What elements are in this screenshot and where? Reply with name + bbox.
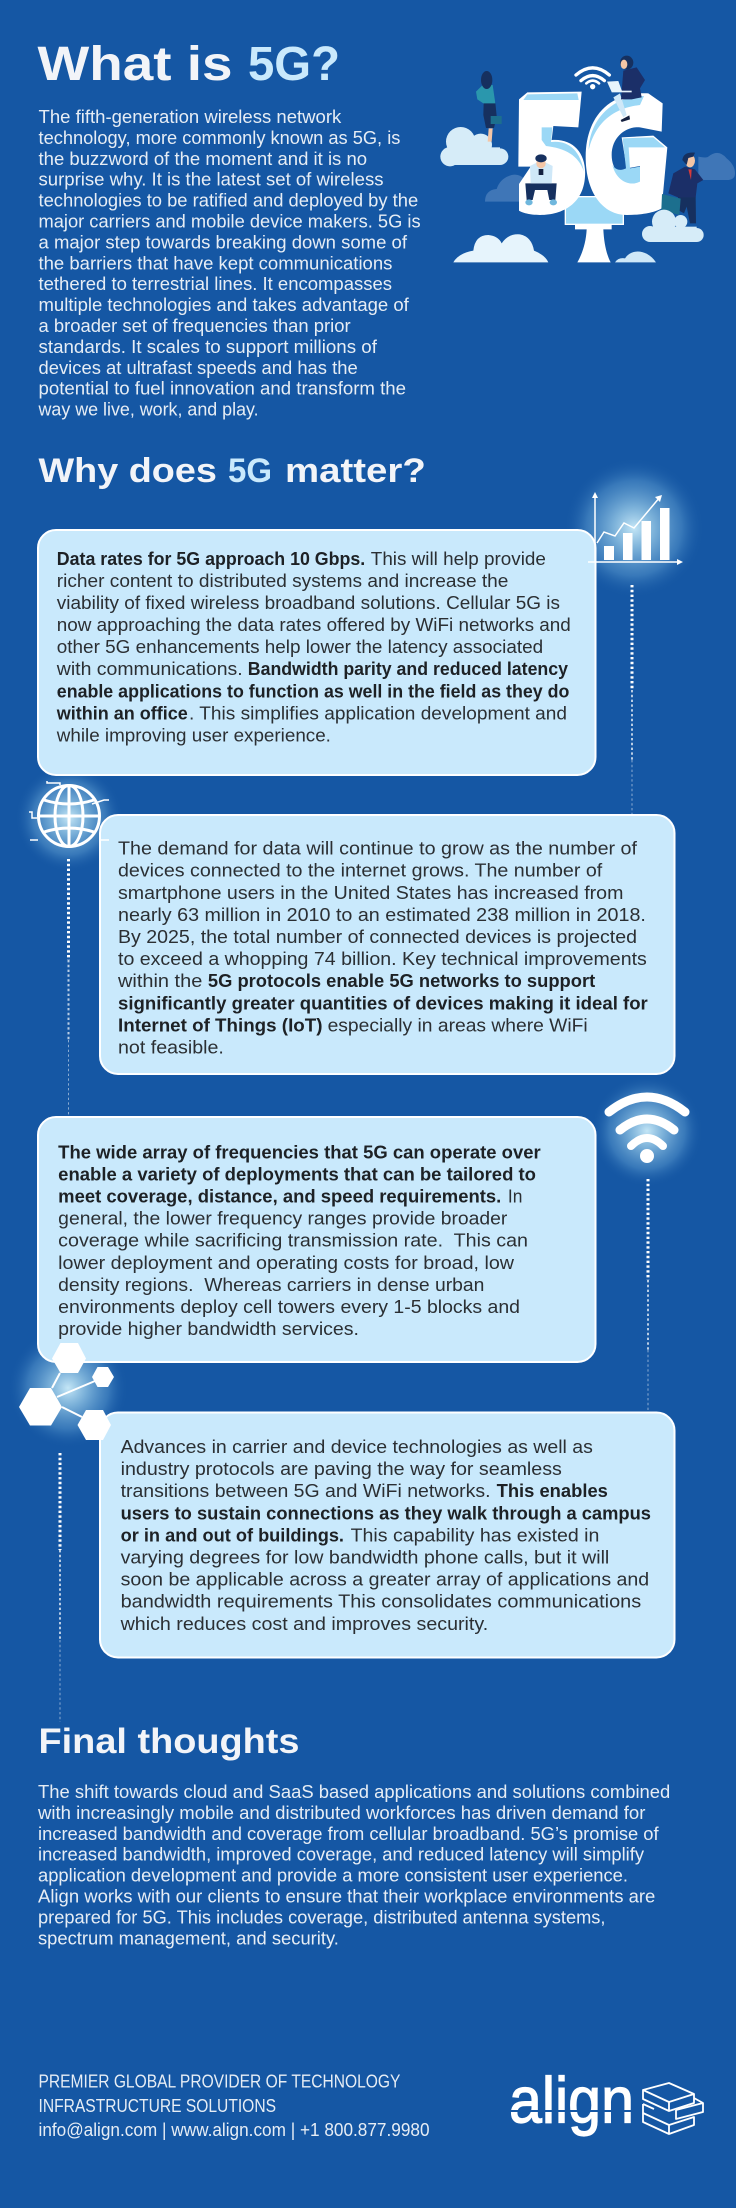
card text: demand for data: Internet of Things (IoT) <box>118 1015 322 1035</box>
footer contact text: PREMIER GLOBAL PROVIDER OF TECHNOLOGY <box>38 2072 400 2092</box>
card text: seamless transitions: soon be applicable across a greater array of applications and <box>121 1570 649 1590</box>
final thoughts text block: increased bandwidth, improved coverage, and reduced latency will simplify <box>38 1845 644 1865</box>
icon: sign plate <box>565 197 623 224</box>
final thoughts text block: application development and provide a more consistent user experience. <box>38 1866 628 1886</box>
card text: data rates: This will help provide <box>371 549 546 569</box>
card text: demand for data: especially in areas where WiFi <box>328 1015 588 1035</box>
icon: bottom clouds <box>453 234 656 262</box>
title: 5G? <box>248 38 340 91</box>
card text: demand for data: The demand for data will continue to grow as the number of <box>118 839 638 859</box>
card text: data rates: Data rates for 5G approach 10 Gbps. <box>57 549 365 569</box>
card text: demand for data: nearly 63 million in 2010 to an estimated 238 million in 2018. <box>118 905 646 925</box>
panel: frequencies card <box>38 1117 596 1362</box>
icon: wifi <box>609 1097 685 1160</box>
intro text block: way we live, work, and play. <box>38 400 259 420</box>
final thoughts text block: spectrum management, and security. <box>38 1928 339 1948</box>
card text: seamless transitions: This capability has existed in <box>351 1525 599 1545</box>
card text: data rates: with communications. <box>56 659 243 679</box>
panel: seamless transitions card <box>100 1412 674 1658</box>
card text: frequencies: meet coverage, distance, and speed requirements. <box>58 1186 501 1206</box>
intro text block: a broader set of frequencies than prior <box>38 316 351 336</box>
icon: man on the phone <box>661 153 703 223</box>
connector: chart to second card <box>630 585 634 814</box>
connector: globe to third card <box>67 859 70 1116</box>
card text: seamless transitions: industry protocols are paving the way for seamless <box>121 1459 562 1479</box>
card text: seamless transitions: This enables <box>497 1481 608 1501</box>
icon: wifi signal <box>576 68 609 88</box>
connector: wifi to fourth card <box>646 1179 650 1412</box>
card text: seamless transitions: users to sustain connections as they walk through a campus <box>121 1503 651 1523</box>
heading: why does 5G matter: Why does <box>38 452 217 490</box>
footer contact text: info@align.com | www.align.com | +1 800.877.9980 <box>38 2120 430 2140</box>
intro text block: potential to fuel innovation and transform the <box>38 379 406 399</box>
final thoughts text block: increased bandwidth and coverage from cellular broadband. 5G’s promise of <box>38 1824 660 1844</box>
card text: data rates: enable applications to function as well in the field as they do <box>57 681 569 701</box>
intro text block: standards. It scales to support millions of <box>38 337 378 357</box>
card text: demand for data: devices connected to the internet grows. The number of <box>118 861 603 881</box>
logo: align <box>505 2064 703 2137</box>
intro text block: tethered to terrestrial lines. It encompasses <box>38 274 392 294</box>
heading: why does 5G matter: 5G <box>228 452 272 490</box>
icon: growth chart <box>588 492 683 565</box>
icon: left cloud <box>440 127 508 166</box>
card text: seamless transitions: bandwidth requirements This consolidates communications <box>121 1592 641 1612</box>
intro text block: devices at ultrafast speeds and has the <box>38 358 358 378</box>
intro text block: multiple technologies and takes advantage of <box>38 295 410 315</box>
card text: frequencies: coverage while sacrificing transmission rate. This can <box>58 1231 528 1251</box>
title <box>38 38 340 91</box>
heading: why does 5G matter <box>38 452 426 490</box>
glow behind globe icon <box>15 764 123 872</box>
intro text block: technologies to be ratified and deployed by the <box>38 191 418 211</box>
final thoughts text block <box>37 1782 670 1948</box>
illustration: 5G sign with people and clouds <box>440 56 735 262</box>
card text: demand for data: to exceed a whopping 74 billion. Key technical improvements <box>118 949 647 969</box>
card text: seamless transitions: or in and out of buildings. <box>121 1525 344 1545</box>
icon: pedestal <box>575 224 612 262</box>
intro text block: a major step towards breaking down some of <box>38 232 408 252</box>
card text: seamless transitions <box>120 1437 651 1634</box>
card text: frequencies: In <box>508 1186 522 1206</box>
intro text block: the buzzword of the moment and it is no <box>38 149 367 169</box>
intro text block: the barriers that have kept communications <box>38 253 392 273</box>
card text: frequencies <box>58 1142 541 1339</box>
card text: seamless transitions: which reduces cost and improves security. <box>120 1614 488 1634</box>
icon: seated man with phone <box>525 154 557 205</box>
card text: demand for data: not feasible. <box>118 1038 224 1058</box>
icon: network hexagons <box>19 1343 114 1440</box>
intro text block <box>38 107 421 420</box>
card text: demand for data: 5G protocols enable 5G networks to support <box>208 971 595 991</box>
connector: network to final section <box>58 1453 62 1722</box>
glow behind wifi icon <box>591 1075 703 1187</box>
icon: digit 5 <box>518 92 585 215</box>
final thoughts text block: with increasingly mobile and distributed workforces has driven demand for <box>37 1803 645 1823</box>
icon: faded clouds <box>485 153 735 202</box>
intro text block: major carriers and mobile device makers. 5G is <box>38 212 421 232</box>
card text: data rates: while improving user experience. <box>56 725 331 745</box>
card text: demand for data: By 2025, the total number of connected devices is projected <box>118 927 637 947</box>
intro text block: technology, more commonly known as 5G, is <box>38 128 400 148</box>
card text: data rates: other 5G enhancements help lower the latency associated <box>57 637 543 657</box>
card text: data rates: Bandwidth parity and reduced latency <box>248 659 568 679</box>
panel: data rates card <box>38 530 596 775</box>
icon: globe <box>29 781 109 846</box>
card text: demand for data: significantly greater quantities of devices making it ideal for <box>118 993 648 1013</box>
final thoughts text block: Align works with our clients to ensure that their workplace environments are <box>38 1886 655 1906</box>
icon: lower right cloud <box>642 210 704 242</box>
icon: standing woman <box>476 71 502 142</box>
logo: align: align <box>509 2064 634 2137</box>
card text: frequencies: environments deploy cell towers every 1-5 blocks and <box>58 1297 520 1317</box>
title: What is <box>38 38 233 91</box>
final thoughts text block: prepared for 5G. This includes coverage, distributed antenna systems, <box>38 1907 606 1927</box>
card text: frequencies: enable a variety of deployments that can be tailored to <box>58 1164 536 1184</box>
intro text block: The fifth-generation wireless network <box>38 107 342 127</box>
card text: frequencies: provide higher bandwidth services. <box>58 1319 359 1339</box>
card text: frequencies: lower deployment and operating costs for broad, low <box>58 1253 515 1273</box>
card text: data rates: within an office <box>56 703 188 723</box>
glow behind network icon <box>8 1328 128 1448</box>
card text: data rates: richer content to distributed systems and increase the <box>57 571 508 591</box>
card text: seamless transitions: varying degrees for low bandwidth phone calls, but it will <box>121 1548 609 1568</box>
footer contact text: INFRASTRUCTURE SOLUTIONS <box>38 2096 276 2116</box>
card text: seamless transitions: transitions between 5G and WiFi networks. <box>121 1481 490 1501</box>
icon: stacked boxes <box>643 2083 703 2134</box>
card text: frequencies: general, the lower frequency ranges provide broader <box>58 1209 507 1229</box>
panel: demand for data card <box>100 815 674 1074</box>
intro text block: surprise why. It is the latest set of wireless <box>38 170 384 190</box>
card text: demand for data <box>117 839 648 1058</box>
card text: data rates: . This simplifies application development and <box>189 703 567 723</box>
card text: data rates <box>56 549 571 745</box>
final thoughts text block: The shift towards cloud and SaaS based applications and solutions combined <box>38 1782 670 1802</box>
card text: data rates: viability of fixed wireless broadband solutions. Cellular 5G is <box>57 593 560 613</box>
card text: seamless transitions: Advances in carrier and device technologies as well as <box>121 1437 593 1457</box>
icon: letter G <box>586 93 667 215</box>
card text: demand for data: smartphone users in the United States has increased from <box>118 883 623 903</box>
card text: demand for data: within the <box>117 971 202 991</box>
icon: woman with laptop <box>607 56 645 122</box>
card text: data rates: now approaching the data rates offered by WiFi networks and <box>57 615 571 635</box>
glow behind chart icon <box>564 458 704 598</box>
card text: frequencies: The wide array of frequencies that 5G can operate over <box>58 1142 541 1162</box>
card text: frequencies: density regions. Whereas carriers in dense urban <box>58 1275 484 1295</box>
footer contact text <box>38 2072 430 2140</box>
heading: why does 5G matter: matter? <box>285 452 426 490</box>
heading: final thoughts: Final thoughts <box>38 1722 300 1761</box>
